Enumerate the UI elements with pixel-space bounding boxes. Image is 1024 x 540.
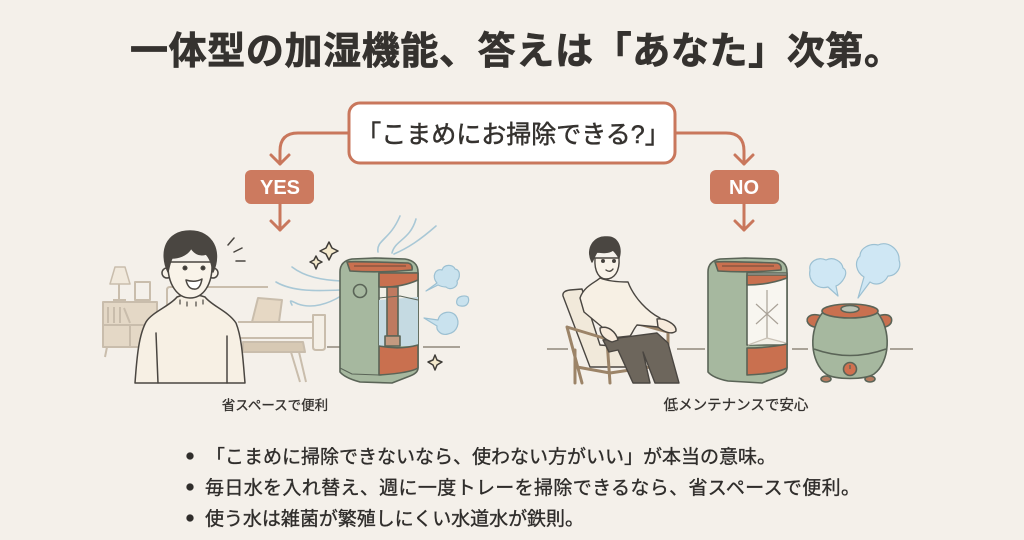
arrow: NO down — [735, 204, 753, 230]
illustration: kettle steam clouds — [810, 244, 900, 298]
bullet list — [186, 446, 860, 530]
bullet 3: 使う水は雑菌が繁殖しにくい水道水が鉄則。 — [205, 508, 584, 530]
caption: yes: 省スペースで便利 — [222, 398, 328, 413]
illustration: integrated humidifier (cared for) — [340, 258, 418, 383]
illustration: sparkles left — [310, 242, 442, 370]
illustration: integrated humidifier (unused tank) — [708, 258, 787, 383]
illustration: smiling man — [135, 231, 245, 383]
caption: no: 低メンテナンスで安心 — [664, 397, 809, 414]
YES badge: YES — [260, 177, 300, 199]
illustration: wind lines — [276, 216, 436, 306]
illustration: kettle-style humidifier — [807, 304, 892, 382]
YES badge — [245, 170, 314, 204]
NO badge — [710, 170, 779, 204]
illustration: living room background — [103, 267, 325, 382]
question box — [349, 103, 675, 163]
arrow: question to NO — [675, 133, 753, 164]
question box: 「こまめにお掃除できる?」 — [356, 121, 670, 149]
illustration: floor line right — [547, 348, 913, 350]
arrow: YES down — [271, 204, 289, 230]
illustration: seated man in chair — [563, 237, 679, 383]
NO badge: NO — [729, 177, 759, 199]
bullet 2: 毎日水を入れ替え、週に一度トレーを掃除できるなら、省スペースで便利。 — [205, 477, 860, 499]
bullet 1: 「こまめに掃除できないなら、使わない方がいい」が本当の意味。 — [206, 446, 776, 468]
illustration: mist clouds left — [424, 265, 469, 334]
arrow: question to YES — [271, 133, 349, 164]
title: 一体型の加湿機能、答えは「あなた」次第。 — [130, 31, 902, 73]
illustration: floor line left — [327, 346, 460, 348]
